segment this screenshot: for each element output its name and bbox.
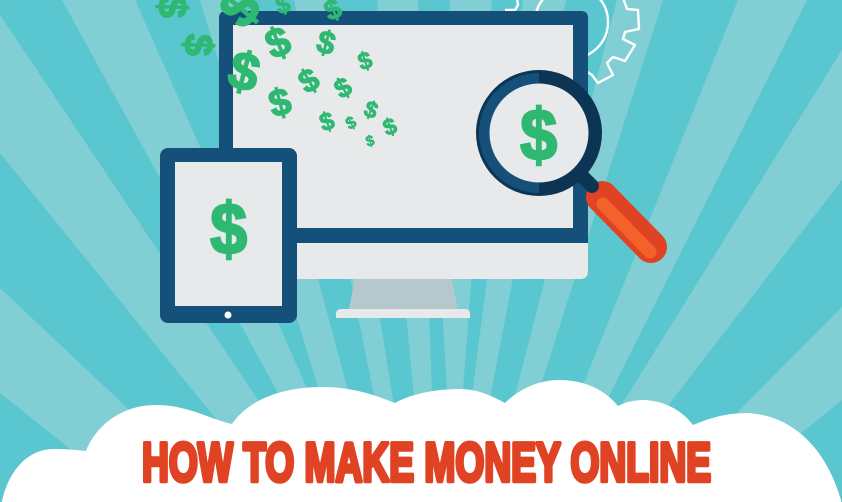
magnifier handle highlight [603,204,650,252]
falling dollar signs: $ [292,60,326,101]
magnifier ring lit half [479,73,539,193]
monitor stand base [336,309,470,318]
monitor frame [219,11,588,243]
falling dollar signs: $ [342,112,360,134]
falling dollar signs: $ [361,95,382,124]
falling dollar signs: $ [355,46,376,76]
falling dollar signs: $ [222,40,266,104]
falling dollar signs: $ [313,23,340,62]
falling dollar signs: $ [259,17,297,68]
monitor screen [233,25,573,228]
monitor chin [219,240,588,279]
magnifier dollar sign: $ [520,94,557,175]
desktop monitor [219,11,588,318]
magnifier handle [602,197,651,247]
icon: magnifying glass [476,70,651,252]
magnifier ring [476,70,602,196]
falling dollar signs: $ [364,132,377,151]
tablet dollar sign: $ [210,188,247,269]
falling dollar signs: $ [316,107,338,137]
falling dollar signs: $ [176,33,220,57]
tablet frame [160,148,297,323]
cloud [2,380,841,502]
falling dollar signs: $ [329,71,357,105]
icon: gear outline [505,0,639,83]
magnifier neck [578,172,592,186]
magnifier lens [490,84,588,182]
tablet [160,148,297,323]
monitor stand [349,278,458,310]
falling dollar signs [150,0,400,151]
tablet screen [175,162,282,306]
tablet home button [224,312,232,318]
falling dollar signs: $ [379,112,400,141]
falling dollar signs: $ [264,80,296,127]
